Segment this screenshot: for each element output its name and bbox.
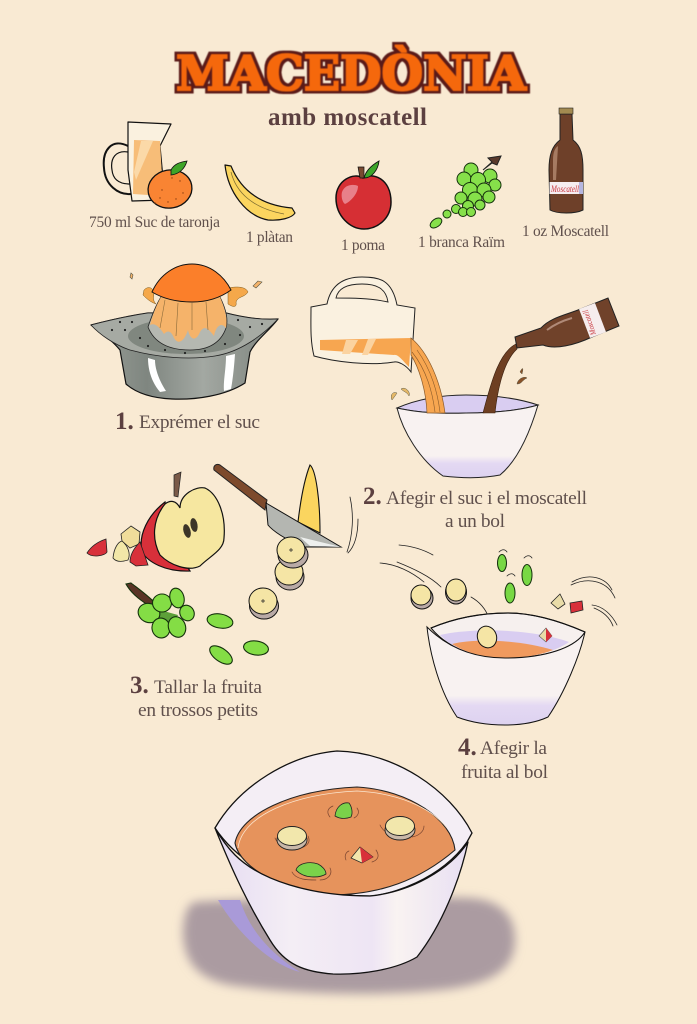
step 1 label bbox=[115, 408, 260, 435]
step 3 illustration: banana slices bbox=[249, 537, 308, 619]
step 3 label: en trossos petits bbox=[138, 700, 258, 721]
label: apple: 1 poma bbox=[341, 237, 385, 254]
step 4 label bbox=[458, 734, 548, 783]
step 4 label: 4. bbox=[458, 734, 477, 761]
step 1 label: Exprémer el suc bbox=[139, 412, 260, 433]
step 2 label: Afegir el suc i el moscatell bbox=[386, 488, 587, 509]
ingredient: juice pitcher and orange bbox=[104, 122, 195, 212]
step 2 label bbox=[363, 483, 587, 532]
step 2 illustration: tilted wine bottle bbox=[483, 298, 619, 413]
subtitle: amb moscatell bbox=[268, 104, 427, 131]
label: juice: 750 ml Suc de taronja bbox=[89, 214, 220, 231]
step 1 illustration: citrus juicer bbox=[91, 264, 278, 399]
label: grapes: 1 branca Raïm bbox=[418, 234, 505, 251]
step 4 label: Afegir la bbox=[480, 738, 547, 759]
step 1 label: 1. bbox=[115, 408, 134, 435]
step 2 illustration: bowl bbox=[397, 395, 538, 478]
step 3 label bbox=[130, 672, 262, 721]
ingredient: moscatel bottle: Moscatell bbox=[550, 184, 579, 194]
step 3 label: 3. bbox=[130, 672, 149, 699]
label: banana: 1 plàtan bbox=[246, 229, 293, 246]
step 2 label: a un bol bbox=[445, 511, 505, 532]
ingredient: banana bbox=[225, 165, 295, 220]
final bowl bbox=[215, 751, 472, 974]
floating fruit in final bowl bbox=[275, 803, 424, 880]
step 3 illustration: grapes bbox=[126, 583, 269, 668]
step 3 illustration: apple half and chunks bbox=[87, 472, 224, 571]
ingredient: apple bbox=[336, 161, 391, 229]
title: MACEDÒNIA bbox=[176, 44, 527, 102]
step 2 illustration: tilted wine bottle: Moscatell bbox=[581, 308, 598, 337]
step 2 illustration: pouring jug bbox=[311, 277, 445, 413]
label: moscatel: 1 oz Moscatell bbox=[522, 223, 609, 240]
step 3 label: Tallar la fruita bbox=[154, 677, 262, 698]
ingredient: moscatel bottle bbox=[549, 108, 583, 213]
step 2 label: 2. bbox=[363, 483, 382, 510]
step 4 label: fruita al bol bbox=[461, 762, 548, 783]
step 3 illustration: knife and banana bbox=[214, 464, 358, 553]
step 4 illustration: falling fruit bbox=[380, 545, 617, 626]
step 4 illustration: bowl with juice bbox=[427, 613, 585, 725]
ingredient: grapes bbox=[428, 156, 501, 230]
final bowl shadow bbox=[183, 897, 515, 994]
